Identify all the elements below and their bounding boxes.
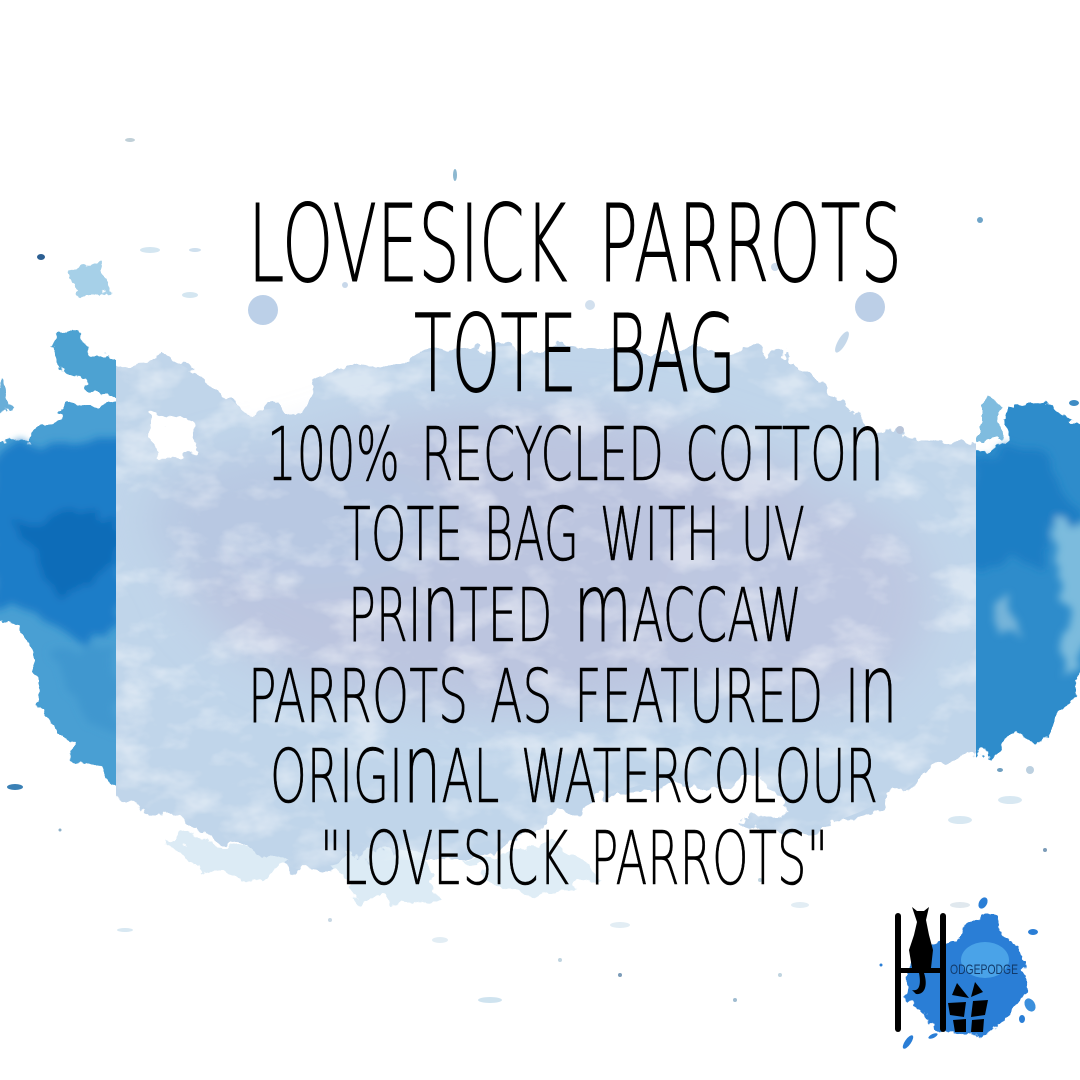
logo letter H bbox=[895, 913, 946, 1032]
watercolour: left blue splash bbox=[0, 260, 116, 786]
description text: PRInTED mACCAW bbox=[348, 552, 802, 664]
watercolour: pale central wash behind the text bbox=[100, 345, 985, 905]
watercolour: mottled texture in the wash bbox=[116, 340, 976, 880]
logo: Hodgepodge bbox=[880, 896, 1038, 1050]
title bbox=[248, 183, 902, 417]
description text: TOTE BAG WITH UV bbox=[343, 492, 805, 578]
title: TOTE BAG bbox=[414, 293, 736, 417]
logo gift bbox=[948, 982, 988, 1032]
watercolour: right blue splash bbox=[970, 402, 1080, 750]
logo cat bbox=[909, 907, 933, 994]
logo wordmark: ODGEPODGE bbox=[950, 961, 1018, 977]
description text bbox=[248, 391, 898, 902]
splatter dots bbox=[7, 138, 1079, 1003]
logo blue splash bbox=[880, 896, 1038, 1050]
